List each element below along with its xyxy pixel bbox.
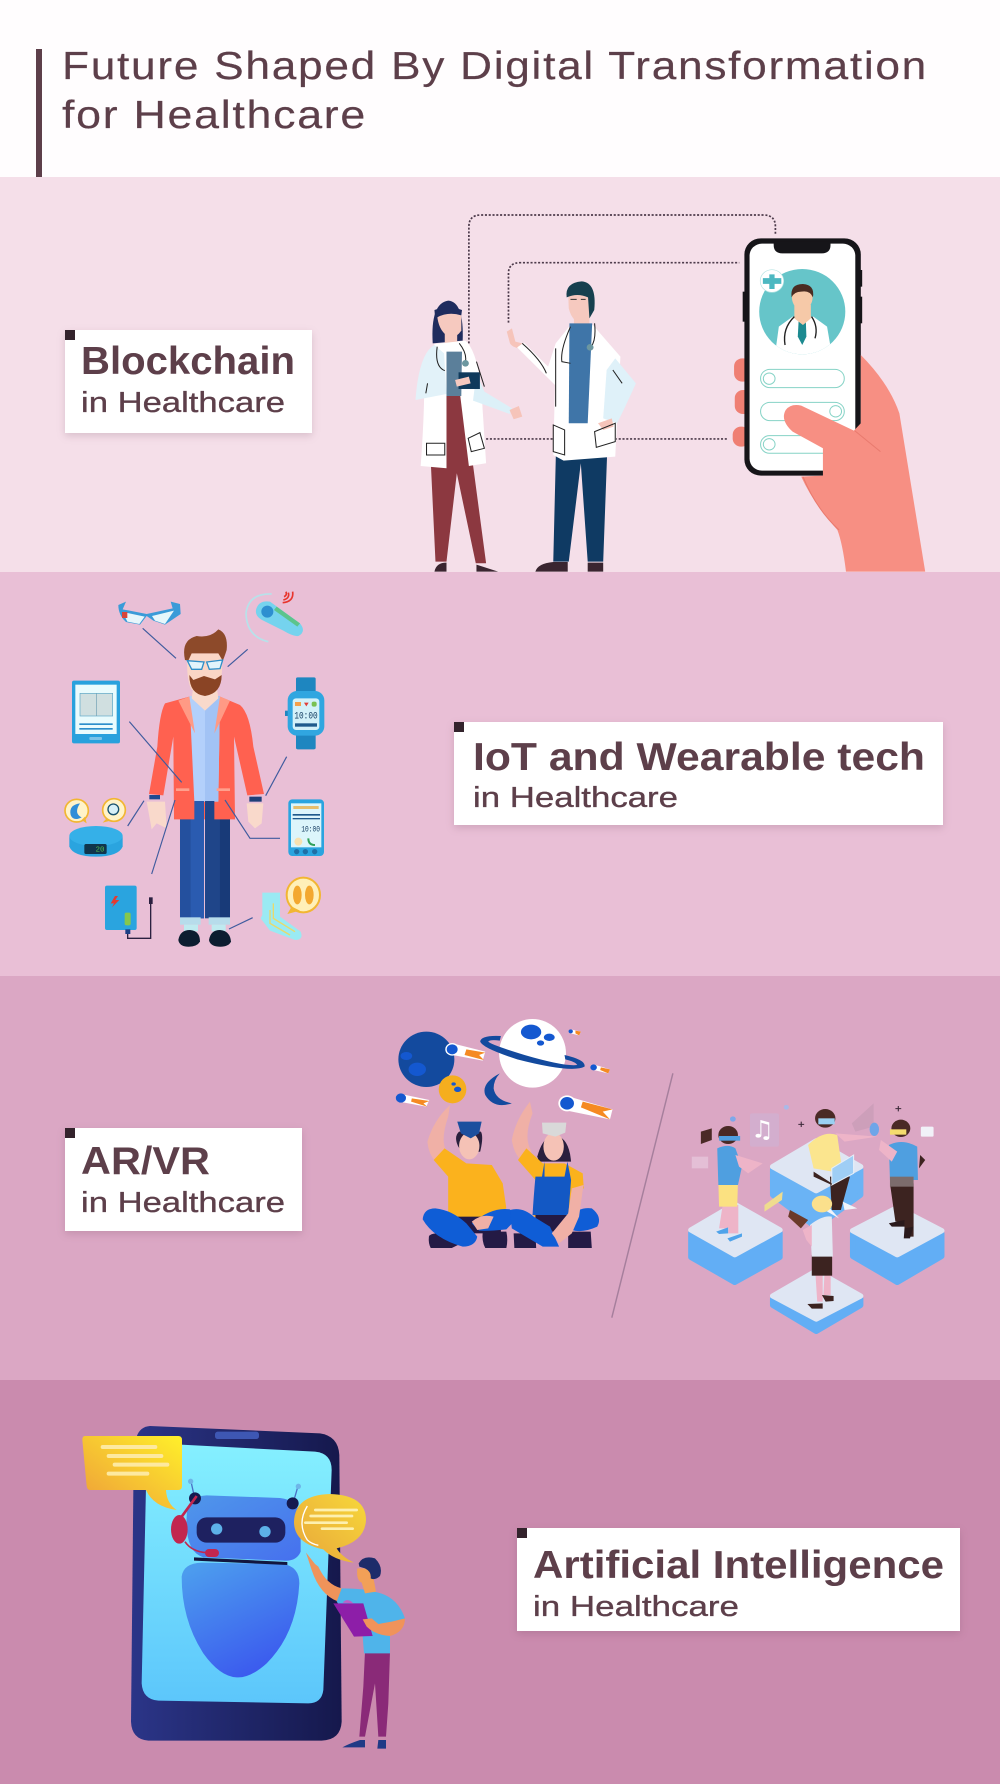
female doctor xyxy=(415,301,522,572)
label card: IoT and Wearable tech in Healthcare: IoT and Wearable tech xyxy=(473,736,925,779)
floating AR icons xyxy=(692,1103,934,1212)
VR user: right xyxy=(879,1120,925,1238)
label card: Blockchain in Healthcare: in Healthcare xyxy=(81,387,285,419)
label card: Artificial Intelligence in Healthcare: in Healthcare xyxy=(533,1591,739,1623)
icon: smartphone xyxy=(288,799,324,856)
icon: bluetooth earpiece xyxy=(246,592,303,642)
hand holding phone xyxy=(784,355,925,572)
smartphone xyxy=(743,238,862,476)
man's smart glasses xyxy=(187,660,223,669)
title block xyxy=(36,45,928,177)
VR user: front with gadget xyxy=(788,1196,834,1309)
label card: Artificial Intelligence in Healthcare: Artificial Intelligence xyxy=(533,1544,944,1587)
illustration: AR and VR scenes xyxy=(396,1019,942,1331)
connector lines xyxy=(128,628,287,929)
person with VR headset, yellow shirt xyxy=(423,1105,515,1248)
page background xyxy=(0,0,1000,177)
rectangular speech bubble xyxy=(82,1436,182,1510)
panel: AR/VR xyxy=(0,976,1000,1380)
hand fingers behind phone xyxy=(733,358,752,447)
icon: smart glasses xyxy=(118,602,181,625)
panel: Blockchain xyxy=(0,177,1000,572)
man with clipboard xyxy=(306,1553,405,1749)
title text: for Healthcare xyxy=(62,94,367,137)
illustration: man with wearable devices xyxy=(65,592,324,947)
label card: AR/VR in Healthcare: AR/VR xyxy=(81,1140,210,1183)
robot xyxy=(171,1479,301,1677)
icon: power bank xyxy=(105,886,153,938)
label card: IoT and Wearable tech in Healthcare: in Healthcare xyxy=(473,782,678,814)
dotted connection lines xyxy=(469,215,775,439)
icon: smartwatch xyxy=(285,677,324,749)
icon: e-reader xyxy=(72,681,120,743)
man figure xyxy=(147,629,264,947)
panel: IoT and Wearable tech xyxy=(0,572,1000,976)
icon: smartphone: 10:00 xyxy=(301,825,320,834)
title text xyxy=(62,45,928,137)
male doctor xyxy=(507,281,636,572)
label card: AR/VR in Healthcare xyxy=(65,1128,302,1231)
floating AR icons: ♫ xyxy=(751,1115,774,1143)
space scene: planets and comets xyxy=(396,1019,613,1119)
round speech bubble xyxy=(294,1494,366,1563)
large phone xyxy=(131,1426,342,1741)
person with AR headset, blue apron xyxy=(510,1102,599,1248)
label card: Artificial Intelligence in Healthcare xyxy=(517,1528,960,1631)
label card: Blockchain in Healthcare: Blockchain xyxy=(81,340,295,383)
icon: smart sock with foot bubble xyxy=(261,878,320,940)
label card: Blockchain in Healthcare xyxy=(65,330,312,433)
VR user: centre back with laptop xyxy=(808,1109,877,1218)
diagonal divider line xyxy=(612,1073,673,1318)
isometric platforms xyxy=(691,1141,942,1331)
title accent bar xyxy=(36,49,42,177)
icon: smartwatch: 10:00 xyxy=(294,710,318,722)
doctor avatar xyxy=(775,284,832,357)
label card: IoT and Wearable tech in Healthcare xyxy=(454,722,943,825)
VR user: left xyxy=(716,1126,763,1242)
icon: sleep tracker band with bubbles xyxy=(65,799,125,857)
plus badge xyxy=(760,270,784,292)
panel: Artificial Intelligence xyxy=(0,1380,1000,1784)
icon: sleep tracker band with bubbles: 20 xyxy=(96,847,104,855)
illustration: doctors connected to a phone xyxy=(415,215,925,572)
illustration: chatbot on a phone xyxy=(82,1426,405,1749)
title text: Future Shaped By Digital Transformation xyxy=(62,45,928,88)
label card: AR/VR in Healthcare: in Healthcare xyxy=(81,1187,285,1219)
form pills xyxy=(761,369,844,453)
